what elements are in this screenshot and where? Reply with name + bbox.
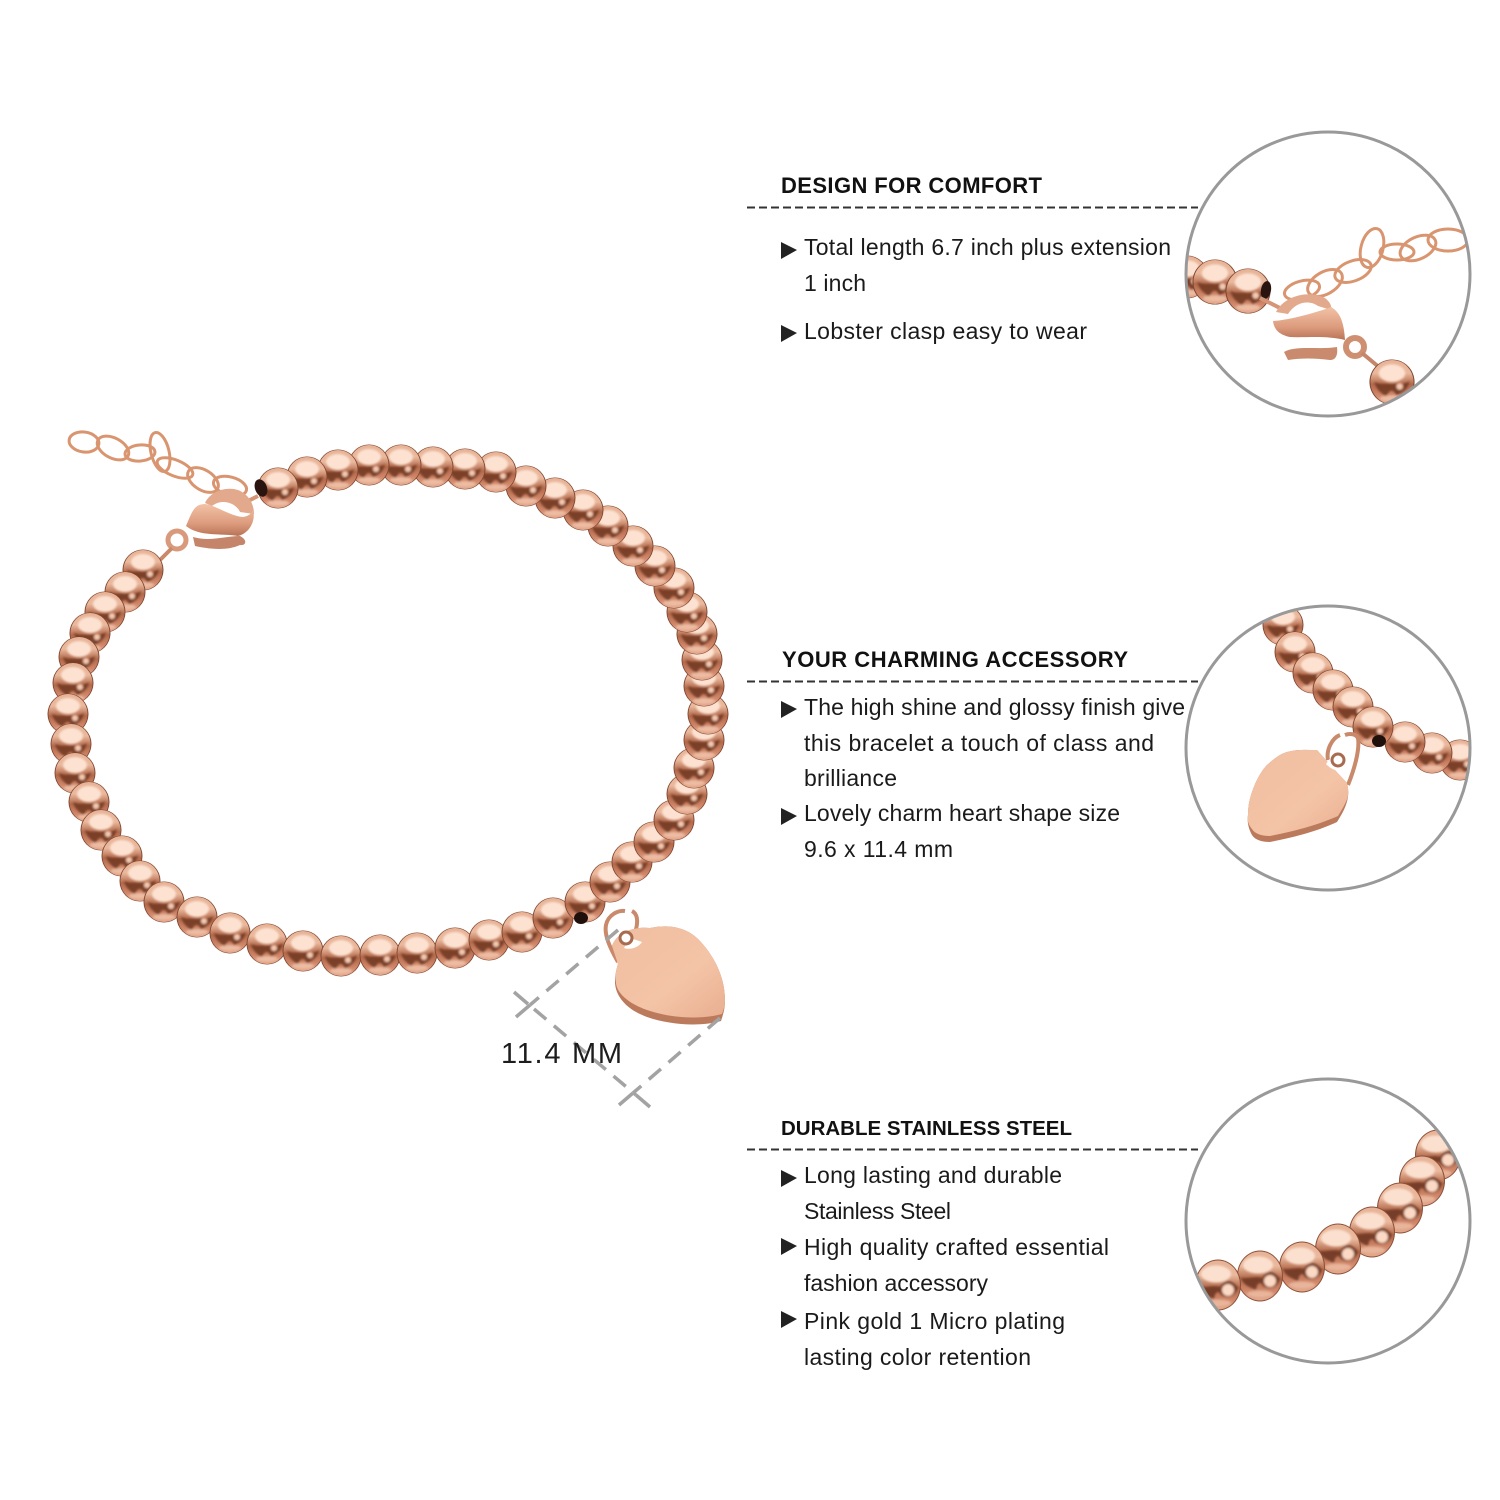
bullet list — [781, 234, 1171, 344]
detail circle: beads — [1186, 1079, 1470, 1363]
bullet list: fashion accessory — [804, 1270, 988, 1296]
dimension label: 11.4 MM — [501, 1038, 622, 1070]
heading: DURABLE STAINLESS STEEL — [781, 1117, 1072, 1140]
heading: YOUR CHARMING ACCESSORY — [782, 647, 1128, 672]
heart charm — [606, 911, 725, 1024]
bullet list: 9.6 x 11.4 mm — [804, 836, 953, 862]
bracelet photo — [48, 430, 728, 1024]
bullet list: Pink gold 1 Micro plating — [804, 1308, 1065, 1334]
bullet list: Total length 6.7 inch plus extension — [804, 234, 1171, 260]
heading: DESIGN FOR COMFORT — [781, 173, 1043, 198]
lobster clasp — [160, 489, 258, 560]
panel: durable stainless steel — [747, 1117, 1198, 1370]
panel: design for comfort — [747, 173, 1198, 344]
bullet list: Long lasting and durable — [804, 1162, 1062, 1188]
panel: your charming accessory — [747, 647, 1198, 862]
bullet list — [781, 1162, 1109, 1370]
bullet list: brilliance — [804, 765, 897, 791]
dimension lines — [514, 930, 720, 1107]
bullet list: High quality crafted essential — [804, 1234, 1109, 1260]
extension chain — [68, 430, 249, 499]
bullet list: lasting color retention — [804, 1344, 1031, 1370]
bullet list: this bracelet a touch of class and — [804, 730, 1154, 756]
bullet list: Lovely charm heart shape size — [804, 800, 1120, 826]
detail circle: heart charm — [1186, 604, 1480, 890]
bullet list: Stainless Steel — [804, 1198, 951, 1224]
bead strand — [48, 444, 728, 976]
bullet list — [781, 694, 1185, 862]
bullet list: 1 inch — [804, 270, 866, 296]
bullet list: The high shine and glossy finish give — [804, 694, 1185, 720]
bullet list: Lobster clasp easy to wear — [804, 318, 1087, 344]
detail circle: clasp — [1165, 132, 1470, 416]
